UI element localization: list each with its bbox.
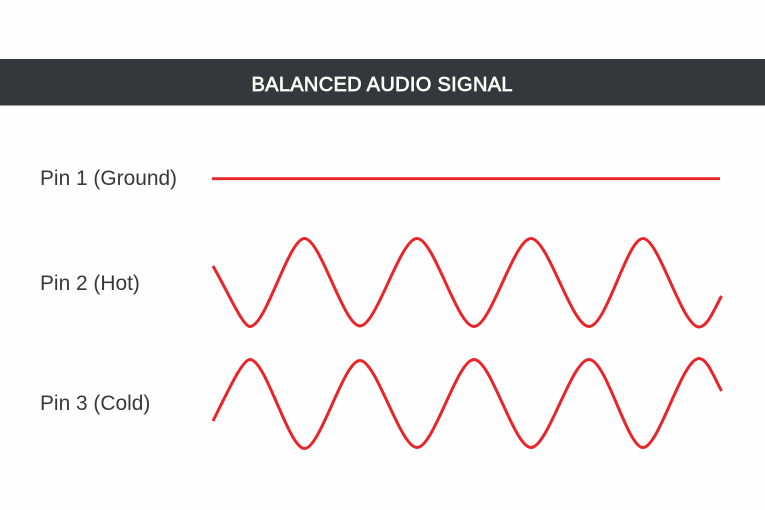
title: BALANCED AUDIO SIGNAL [252,74,512,96]
waveform: Pin 2 hot [213,238,722,327]
signal line: Pin 1 ground [212,177,720,180]
label: Pin 3: Pin 3 (Cold) [40,392,150,415]
label: Pin 2: Pin 2 (Hot) [40,272,140,295]
label: Pin 1: Pin 1 (Ground) [40,167,177,190]
waveform: Pin 3 cold [213,358,722,448]
title banner [0,59,765,106]
